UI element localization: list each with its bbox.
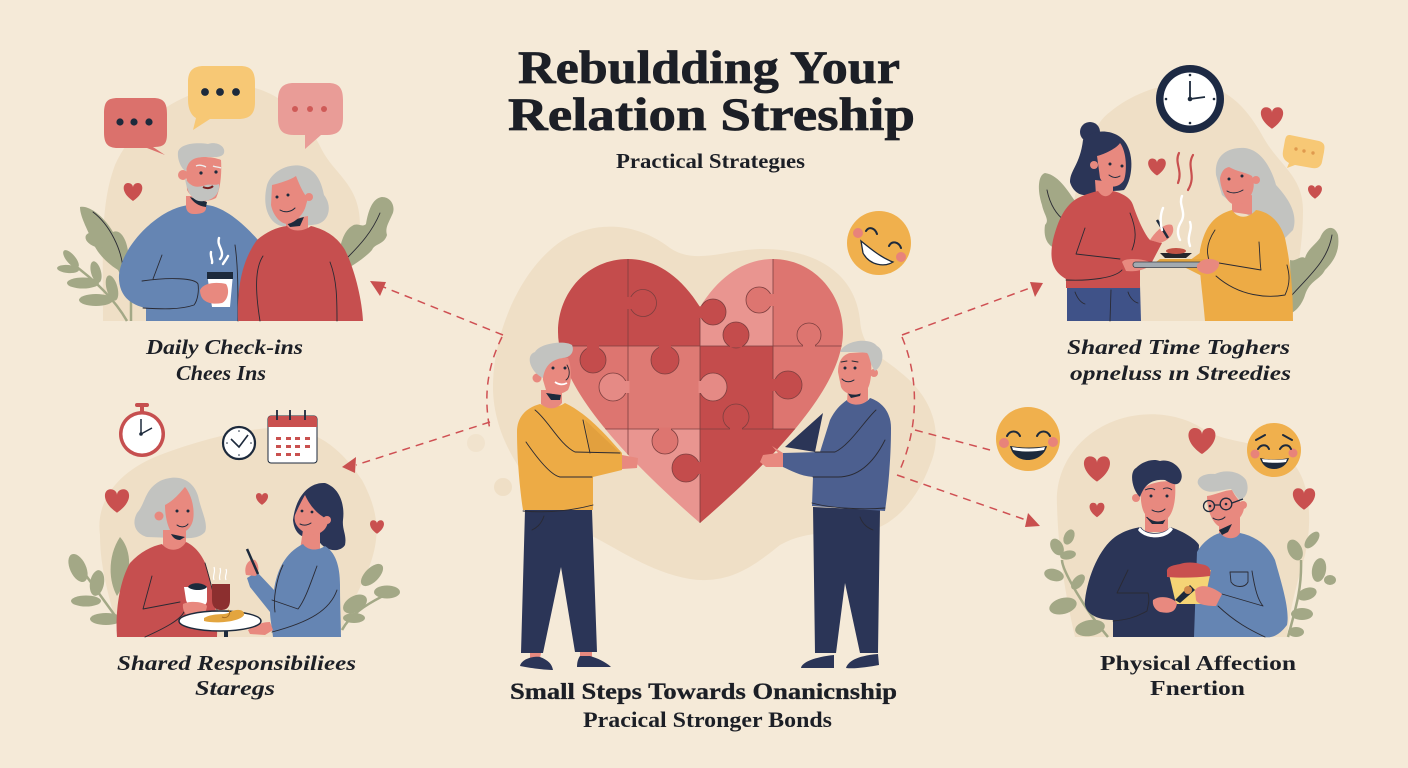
hearts — [105, 489, 384, 534]
caption: shared time: opneluss ın Streedies — [1070, 361, 1291, 385]
caption: physical affection: Fnertion — [1150, 676, 1245, 700]
panel: physical affection — [1043, 414, 1336, 638]
title — [508, 42, 915, 141]
caption: shared time — [1067, 335, 1291, 385]
arrow: to shared responsibilities — [342, 422, 490, 473]
coffee cup — [200, 238, 233, 307]
woman in red — [238, 165, 363, 321]
caption: physical affection: Physical Affection — [1100, 651, 1296, 675]
calendar — [268, 410, 317, 463]
panel: central puzzle heart — [467, 211, 936, 670]
subtitle: Practical Strategıes — [616, 149, 805, 173]
person in blue — [760, 341, 891, 668]
popcorn box — [1153, 562, 1222, 613]
panel: shared time together — [1039, 65, 1338, 321]
woman with dark hair — [1051, 122, 1173, 321]
hearts — [1084, 428, 1315, 517]
emoji: grinning face right — [1247, 423, 1301, 477]
arrow: to shared time — [902, 282, 1043, 335]
caption: daily check-ins: Daily Check-ins — [145, 335, 303, 359]
speech bubble pink — [278, 83, 343, 149]
title: Relation Streship — [508, 89, 915, 141]
puzzle heart — [558, 259, 843, 523]
caption: shared responsibilities: Staregs — [195, 676, 275, 700]
emoji: grinning face left — [996, 407, 1060, 471]
caption: shared time: Shared Time Toghers — [1067, 335, 1290, 359]
heart — [124, 183, 142, 201]
man in navy — [1085, 460, 1199, 637]
plants — [1043, 528, 1336, 638]
caption: daily check-ins — [145, 335, 303, 385]
caption: shared responsibilities: Shared Responsibiliees — [117, 651, 356, 675]
arrow: to physical affection — [897, 475, 1040, 527]
older person in blue — [1194, 471, 1288, 637]
central caption: Small Steps Towards Onanicnship — [510, 679, 897, 704]
caption: shared responsibilities — [117, 651, 356, 700]
emoji: laughing face — [847, 211, 911, 275]
woman with dark hair — [245, 483, 345, 637]
speech bubble red — [104, 98, 167, 155]
title: Rebuldding Your — [518, 42, 900, 94]
caption: daily check-ins: Chees Ins — [176, 361, 266, 385]
left plants — [57, 207, 133, 321]
panel: daily check-ins — [57, 66, 394, 321]
small clock — [223, 427, 255, 459]
dashed arc right — [899, 337, 914, 472]
cups — [183, 567, 230, 619]
person in yellow — [517, 343, 638, 670]
stopwatch — [119, 403, 165, 457]
arrow: to daily check-ins — [370, 281, 503, 335]
caption: physical affection — [1100, 651, 1296, 700]
clock — [1156, 65, 1224, 133]
right plant — [338, 197, 394, 273]
plants — [1039, 173, 1338, 313]
tray with dish — [1133, 196, 1219, 274]
plants — [64, 537, 400, 630]
woman with grey hair — [1182, 148, 1294, 321]
speech bubble yellow — [188, 66, 255, 130]
man with coffee — [119, 143, 258, 321]
central caption — [510, 679, 897, 732]
dashed arc left — [487, 337, 502, 430]
hearts — [1148, 107, 1322, 199]
arrow: to emoji — [915, 430, 990, 450]
woman with grey hair — [117, 478, 217, 637]
panel: shared responsibilities — [64, 403, 400, 637]
plate with pastry — [179, 610, 261, 637]
central caption: Pracical Stronger Bonds — [583, 707, 832, 732]
small speech bubble — [1283, 135, 1324, 168]
red squiggles — [1177, 153, 1193, 190]
